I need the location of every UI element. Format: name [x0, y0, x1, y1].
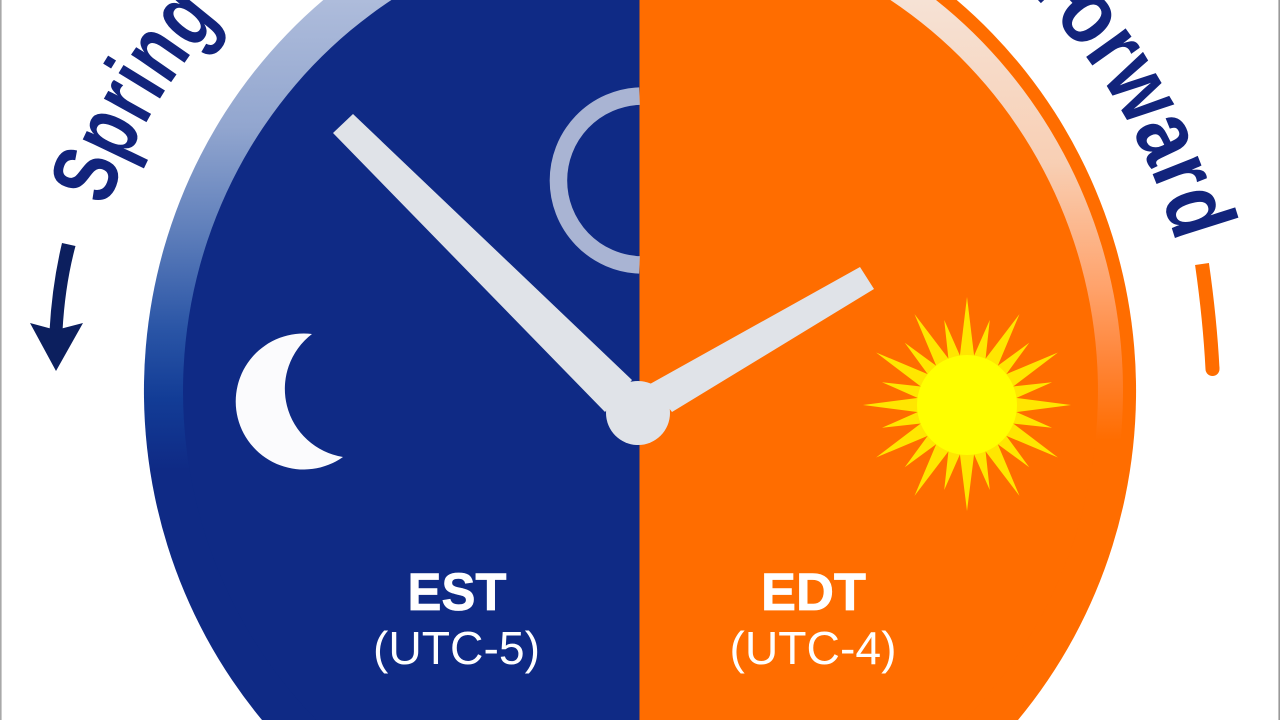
left heading word: Spring: S: [30, 135, 143, 214]
arrow: curved down arrow on the left: [30, 243, 83, 371]
right heading word: Forward: r: [1066, 5, 1167, 89]
label: EST (UTC-5): (UTC-5): [373, 622, 540, 674]
curved heading: Spring Forward: [30, 0, 1255, 249]
left heading word: Spring: p: [50, 91, 161, 173]
right heading word: Forward: w: [1083, 34, 1203, 140]
left heading word: Spring: n: [101, 4, 209, 98]
icon: ring on the night half: [558, 96, 640, 265]
right heading word: Forward: d: [1143, 173, 1255, 249]
right heading word: Forward: r: [1132, 139, 1238, 205]
icon: crescent moon: [236, 333, 343, 469]
left heading word: Spring: i: [87, 43, 185, 113]
panel: night half: [144, 0, 640, 720]
label: EST (UTC-5): [373, 563, 540, 674]
clock face: [144, 0, 1136, 720]
label: EST (UTC-5): EST: [408, 563, 506, 622]
label: EDT (UTC-4): (UTC-4): [730, 622, 896, 674]
label: EDT (UTC-4): [730, 563, 896, 674]
label: EDT (UTC-4): EDT: [761, 563, 866, 622]
left heading word: Spring: [30, 0, 273, 214]
icon: sun: [863, 297, 1071, 511]
clock hands and pivot: [333, 114, 874, 445]
arrow: orange curved stroke on the right: [1202, 264, 1220, 376]
left heading word: Spring: r: [72, 63, 175, 136]
right heading word: Forward: [1015, 0, 1255, 249]
right heading word: Forward: a: [1114, 94, 1225, 179]
panel: day half: [640, 0, 1136, 720]
